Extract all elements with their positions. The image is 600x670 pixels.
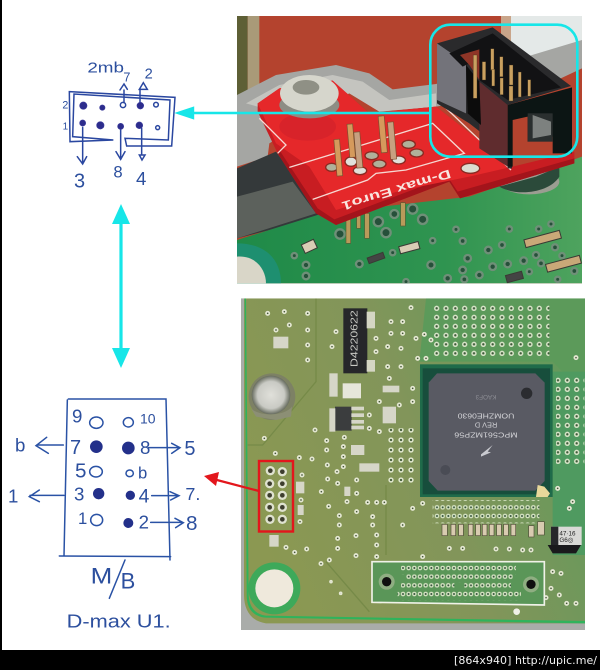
handwritten labels: 5 bbox=[184, 438, 195, 460]
open pins bbox=[120, 102, 126, 108]
green pcb bbox=[237, 157, 582, 283]
handwritten labels: 7 bbox=[123, 71, 130, 85]
open pins bbox=[90, 417, 103, 428]
handwritten labels: 9 bbox=[72, 405, 82, 426]
via fields bbox=[433, 305, 549, 358]
sketch: connector pinout bbox=[62, 61, 175, 192]
handwritten labels: B bbox=[121, 568, 135, 593]
main processor bbox=[420, 364, 553, 497]
handwritten labels: 8 bbox=[140, 437, 150, 458]
handwritten labels: 7. bbox=[185, 484, 200, 504]
handwritten labels: 10 bbox=[140, 410, 156, 426]
small ic and parts bbox=[335, 407, 352, 431]
header outline bbox=[59, 399, 171, 560]
main processor: UOMZHE0630 bbox=[458, 411, 514, 420]
footer bar bbox=[0, 650, 600, 670]
cyan callout: connector highlight bbox=[430, 25, 577, 157]
handwritten labels: 4 bbox=[139, 487, 150, 508]
main processor: REV D bbox=[475, 421, 497, 430]
mounting hole bottom-left bbox=[248, 562, 300, 614]
handwritten labels: 2 bbox=[62, 99, 68, 111]
tantalum capacitor: G6◎ bbox=[559, 537, 573, 544]
connector pins bbox=[473, 49, 531, 101]
ic: D4220622 bbox=[343, 308, 375, 373]
red arrowhead bbox=[204, 472, 219, 486]
smd parts bbox=[301, 230, 581, 283]
handwritten labels: 5 bbox=[75, 460, 86, 483]
resistor row bbox=[442, 522, 544, 537]
handwritten labels: 2mb bbox=[87, 61, 124, 77]
arrows bbox=[77, 83, 147, 164]
frame: left edge bbox=[0, 0, 2, 650]
handwritten labels: b bbox=[138, 464, 147, 483]
solder pads bbox=[326, 140, 480, 175]
handwritten labels bbox=[62, 61, 153, 192]
filled pins bbox=[80, 102, 144, 129]
cyan double arrow: between sketches bbox=[112, 204, 130, 368]
chip marking: MPC561MZP56 bbox=[454, 430, 518, 439]
silk label: D-max Euro1 bbox=[340, 166, 453, 213]
handwritten labels: 3 bbox=[74, 170, 85, 192]
red adapter board bbox=[258, 81, 574, 225]
black box connector bbox=[437, 27, 571, 168]
tantalum capacitor: 47·16 bbox=[559, 531, 576, 538]
filled pins bbox=[90, 440, 135, 528]
scattered vias bbox=[263, 306, 578, 605]
cyan arrow: photo to pinout sketch bbox=[178, 108, 430, 118]
handwritten labels: 8 bbox=[186, 512, 197, 535]
screw bbox=[279, 100, 340, 118]
handwritten labels: 2 bbox=[145, 66, 153, 82]
handwritten labels: 7 bbox=[70, 437, 81, 459]
handwritten labels: D-max U1. bbox=[67, 610, 171, 631]
tantalum capacitor bbox=[548, 527, 582, 553]
header holes bbox=[265, 466, 287, 524]
handwritten labels: 8 bbox=[113, 162, 123, 181]
connector outline bbox=[69, 92, 175, 146]
standoff bbox=[501, 172, 560, 194]
handwritten labels: 1 bbox=[78, 509, 87, 528]
dark chassis bbox=[237, 152, 323, 238]
grey tray edge bbox=[241, 298, 585, 630]
board base bbox=[241, 298, 585, 630]
main processor: KAOF3 bbox=[475, 393, 496, 400]
ic: D4220622: D4220622 bbox=[350, 310, 361, 367]
red arrow: header to sketch bbox=[215, 480, 259, 491]
pin leaders bbox=[29, 437, 183, 528]
handwritten labels: M bbox=[91, 563, 112, 588]
handwritten labels: b bbox=[15, 435, 25, 456]
handwritten labels: 1 bbox=[63, 121, 69, 132]
handwritten labels: 1 bbox=[8, 486, 18, 507]
handwritten labels: 2 bbox=[139, 511, 149, 532]
upper pins bbox=[334, 116, 397, 176]
bottom connector footprint bbox=[372, 562, 544, 605]
mounting screw top-left bbox=[249, 373, 295, 420]
red highlight box: header holes bbox=[259, 461, 293, 532]
footer text: [864x940] http://upic.me/ bbox=[454, 654, 597, 667]
handwritten labels: 4 bbox=[136, 168, 146, 189]
photo: ECU motherboard bbox=[241, 298, 585, 630]
photo: D-max Euro1 adapter board with connector bbox=[237, 16, 582, 284]
handwritten labels: 3 bbox=[74, 484, 84, 505]
pcb vias bbox=[292, 204, 577, 284]
silk lines bbox=[259, 105, 511, 199]
sketch: motherboard pinout bbox=[8, 399, 200, 631]
lower pins bbox=[346, 203, 405, 243]
handwritten labels bbox=[8, 405, 200, 631]
metal bracket bbox=[237, 40, 582, 167]
